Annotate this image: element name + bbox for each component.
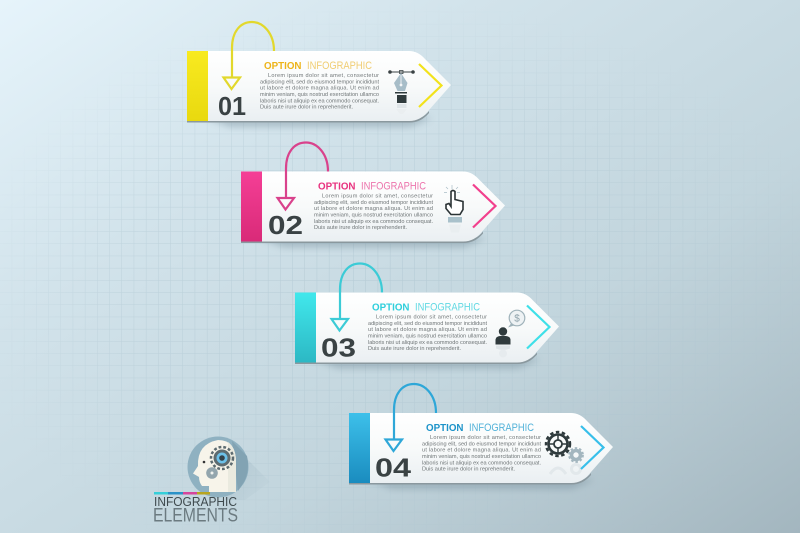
colour band — [349, 413, 370, 483]
number: 01 — [218, 91, 246, 121]
body text: minim veniam, quis nostrud exercitation ullamco — [260, 92, 379, 98]
chevron — [473, 184, 496, 228]
heading — [264, 60, 372, 72]
body text: Lorem ipsum dolor sit amet, consectetur — [322, 194, 433, 200]
colour band — [295, 292, 316, 362]
heading — [372, 302, 480, 314]
heading: OPTION — [318, 180, 356, 192]
body text: ut labore et dolore magna aliqua. Ut enim ad — [260, 86, 379, 92]
number: 03 — [321, 332, 356, 362]
colour bar — [154, 492, 210, 494]
heading — [318, 180, 426, 192]
body text — [314, 194, 433, 231]
curved arrow — [224, 22, 274, 89]
icon: pen tool — [388, 70, 415, 114]
body text: laboris nisi ut aliquip ex ea commodo consequat. — [368, 340, 487, 346]
body text: minim veniam, quis nostrud exercitation ullamco — [314, 212, 433, 218]
body text: adipiscing elit, sed do eiusmod tempor incididunt — [368, 321, 487, 327]
number: 04 — [375, 452, 412, 482]
body text: Duis aute irure dolor in reprehenderit. — [368, 346, 461, 352]
logo: infographic elements — [153, 436, 270, 526]
heading: OPTION — [264, 60, 302, 72]
body text: Duis aute irure dolor in reprehenderit. — [260, 105, 353, 111]
heading: INFOGRAPHIC — [361, 180, 426, 192]
card shape — [241, 172, 505, 242]
body text: Lorem ipsum dolor sit amet, consectetur — [376, 314, 487, 320]
number: 02 — [268, 210, 303, 240]
body text: minim veniam, quis nostrud exercitation ullamco — [422, 454, 541, 460]
logo title — [153, 495, 238, 526]
heading: INFOGRAPHIC — [415, 302, 480, 314]
curved arrow — [332, 264, 382, 330]
body text: Lorem ipsum dolor sit amet, consectetur — [430, 435, 541, 441]
heading: INFOGRAPHIC — [307, 60, 372, 72]
panel: option 04 — [349, 384, 613, 489]
card shape — [349, 413, 613, 483]
body text: Duis aute irure dolor in reprehenderit. — [422, 467, 515, 473]
heading — [426, 422, 534, 434]
card shape — [295, 292, 559, 362]
body text: minim veniam, quis nostrud exercitation ullamco — [368, 334, 487, 340]
icon: person with dollar bubble: $ — [514, 314, 520, 324]
body text: ut labore et dolore magna aliqua. Ut enim ad — [368, 327, 487, 333]
logo title: ELEMENTS — [153, 504, 238, 526]
body text: laboris nisi ut aliquip ex ea commodo consequat. — [422, 460, 541, 466]
panel: option 03 — [295, 264, 559, 368]
icon: person with dollar bubble — [496, 310, 525, 358]
body text: adipiscing elit, sed do eiusmod tempor incididunt — [314, 200, 433, 206]
panel: option 02 — [241, 142, 505, 248]
colour band — [241, 172, 262, 242]
panel: option 01 — [187, 22, 451, 127]
body text — [422, 435, 541, 473]
body text: adipiscing elit, sed do eiusmod tempor incididunt — [422, 441, 541, 447]
heading: OPTION — [372, 302, 410, 314]
chevron — [581, 426, 604, 469]
icon: gears — [546, 432, 583, 474]
curved arrow — [386, 384, 436, 451]
curved arrow — [278, 142, 328, 210]
body text — [260, 73, 379, 111]
chevron — [419, 64, 442, 107]
card shape — [187, 51, 451, 121]
body text: adipiscing elit, sed do eiusmod tempor incididunt — [260, 79, 379, 85]
body text: laboris nisi ut aliquip ex ea commodo consequat. — [314, 219, 433, 225]
logo title: INFOGRAPHIC — [154, 495, 237, 509]
body text: ut labore et dolore magna aliqua. Ut enim ad — [314, 206, 433, 212]
body text: ut labore et dolore magna aliqua. Ut enim ad — [422, 448, 541, 454]
icon: pointing hand — [444, 185, 463, 232]
chevron — [527, 306, 550, 348]
body text: Lorem ipsum dolor sit amet, consectetur — [268, 73, 379, 79]
body text: laboris nisi ut aliquip ex ea commodo consequat. — [260, 98, 379, 104]
heading: OPTION — [426, 422, 464, 434]
icon: head with gear — [188, 436, 270, 500]
heading: INFOGRAPHIC — [469, 422, 534, 434]
colour band — [187, 51, 208, 121]
body text — [368, 314, 487, 352]
body text: Duis aute irure dolor in reprehenderit. — [314, 225, 407, 231]
